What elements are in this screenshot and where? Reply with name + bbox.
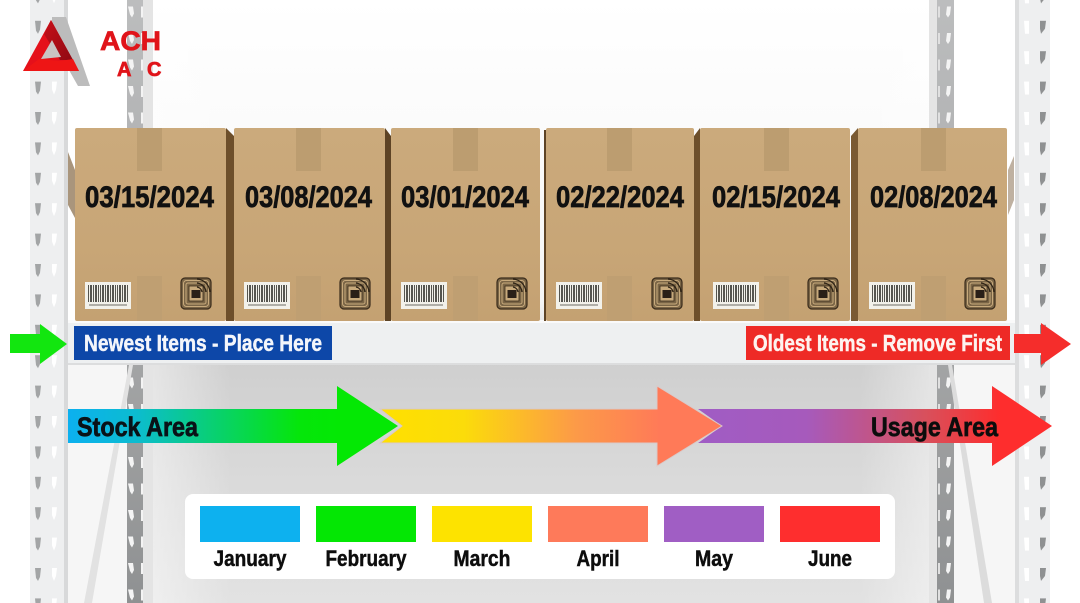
flow arrow: usage section: Usage Area xyxy=(871,412,999,442)
legend: May xyxy=(664,506,764,571)
label: newest items: Newest Items - Place Here xyxy=(84,330,322,356)
box 2: 03/08/2024 xyxy=(245,181,372,214)
legend panel xyxy=(185,494,895,579)
logo wordmark: ACH xyxy=(100,26,161,56)
box 3 xyxy=(391,128,540,321)
brace right xyxy=(948,365,992,603)
rear post left xyxy=(127,0,153,603)
legend: February: February xyxy=(326,546,407,571)
wall shading xyxy=(153,0,938,603)
label: newest items xyxy=(74,326,332,360)
box 5: 02/15/2024 xyxy=(712,181,840,214)
side wall left xyxy=(68,365,128,603)
box 5 xyxy=(694,128,850,321)
box 4 xyxy=(544,128,694,321)
legend: April xyxy=(548,506,648,571)
legend: May: May xyxy=(695,546,734,571)
brace left xyxy=(84,365,133,603)
red exit arrow xyxy=(1014,323,1071,365)
box 6 xyxy=(851,128,1007,321)
legend: June: June xyxy=(808,546,852,571)
side wall right xyxy=(954,365,1015,603)
legend: April: April xyxy=(576,546,620,571)
logo wordmark xyxy=(100,26,161,81)
box 1: 03/15/2024 xyxy=(85,181,214,214)
label: oldest items: Oldest Items - Remove First xyxy=(753,330,1002,356)
legend: June xyxy=(780,506,880,571)
shelf back brace left xyxy=(68,152,75,218)
green entry arrow xyxy=(10,324,67,364)
box 4: 02/22/2024 xyxy=(556,181,684,214)
logo xyxy=(23,17,161,86)
legend: March: March xyxy=(454,546,510,571)
shelf back brace right xyxy=(1008,156,1014,215)
front post left xyxy=(30,0,68,603)
logo icon xyxy=(23,17,90,86)
legend: February xyxy=(316,506,416,571)
legend: March xyxy=(432,506,532,571)
flow arrow: usage section xyxy=(698,386,1052,466)
flow arrow: stock section xyxy=(68,386,398,466)
legend: January xyxy=(200,506,300,571)
front post right xyxy=(1015,0,1050,603)
box 2 xyxy=(234,128,391,321)
box 3: 03/01/2024 xyxy=(401,181,529,214)
box 6: 02/08/2024 xyxy=(870,181,997,214)
logo wordmark: A xyxy=(117,59,131,81)
flow arrow: middle section xyxy=(380,386,722,466)
legend: January: January xyxy=(214,546,287,571)
label: oldest items xyxy=(746,326,1010,360)
box 1 xyxy=(75,128,234,321)
rear post right xyxy=(929,0,954,603)
logo wordmark: C xyxy=(147,59,161,81)
flow arrow: stock section: Stock Area xyxy=(77,412,199,442)
shelf beam xyxy=(68,320,1015,365)
